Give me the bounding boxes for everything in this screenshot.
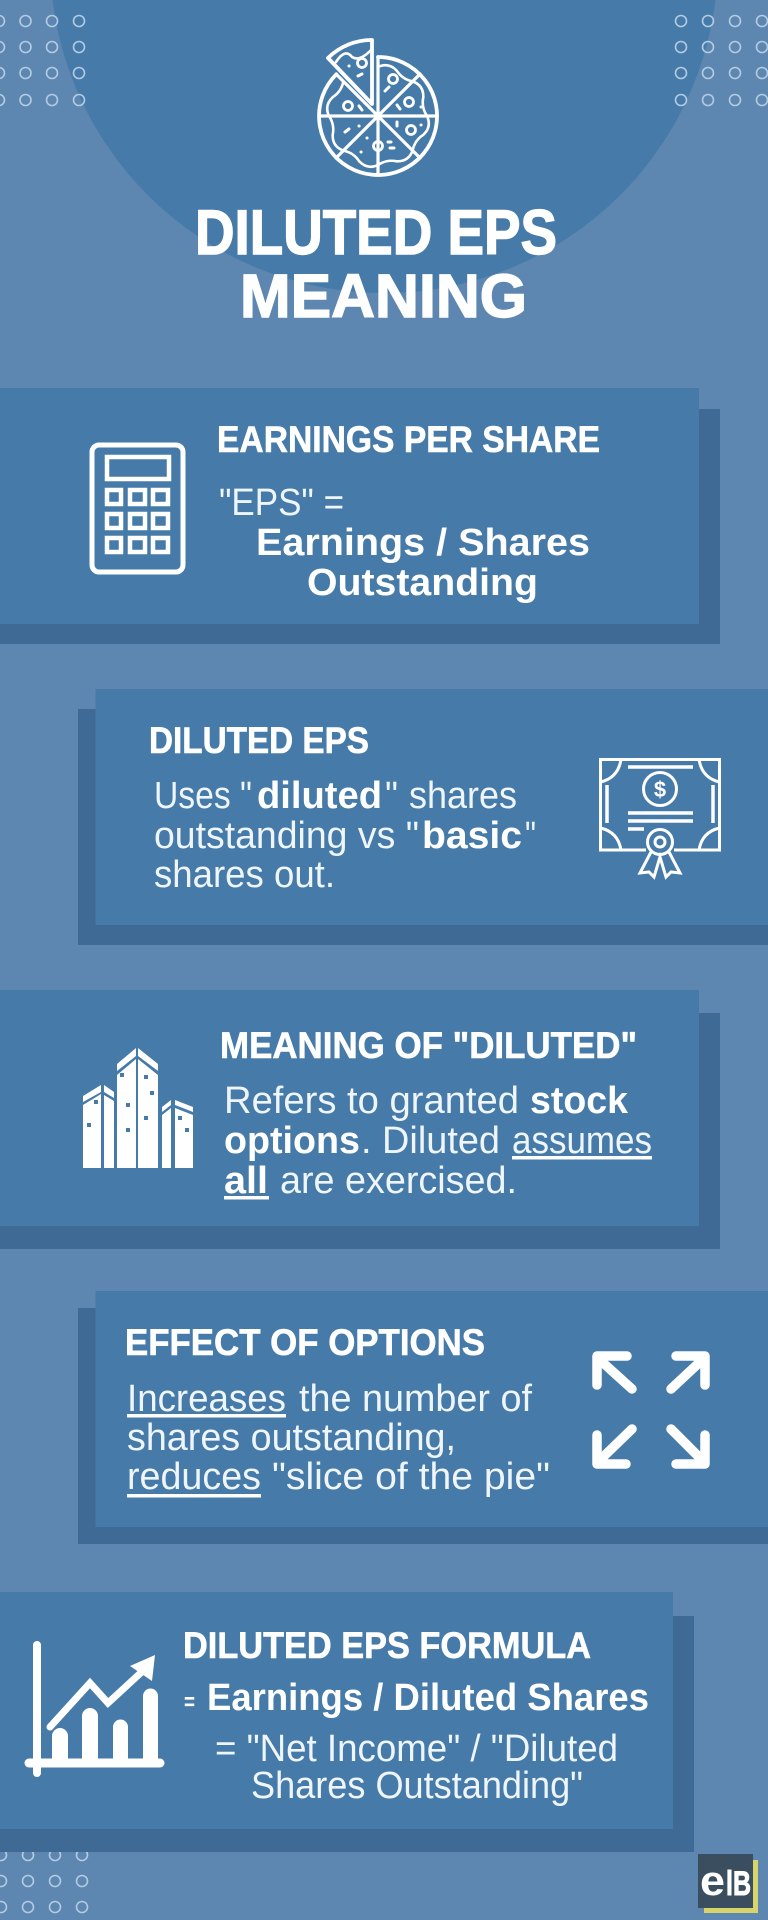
- icon: growth bar chart: [29, 1645, 160, 1773]
- formula text: [219, 482, 590, 604]
- body text: [224, 1080, 652, 1202]
- panel: effect of options: [78, 1291, 768, 1544]
- dot pattern: top left: [0, 16, 84, 106]
- panel: earnings per share: [0, 388, 720, 644]
- body text: "slice of the pie": [272, 1456, 550, 1498]
- panel: diluted EPS formula: [0, 1592, 694, 1852]
- title: MEANING: [240, 262, 527, 330]
- body text: basic: [422, 815, 522, 857]
- heading: EFFECT OF OPTIONS: [125, 1322, 485, 1363]
- heading: DILUTED EPS FORMULA: [183, 1625, 591, 1666]
- title: DILUTED EPS: [195, 198, 557, 268]
- background circle: [50, 0, 718, 293]
- body text: stock: [530, 1080, 629, 1122]
- body text: the number of: [299, 1378, 532, 1420]
- heading: EARNINGS PER SHARE: [217, 419, 600, 460]
- logo: e: [700, 1857, 725, 1904]
- formula text: Earnings / Shares: [256, 522, 590, 564]
- formula text: Outstanding: [307, 562, 538, 604]
- body text: assumes: [512, 1120, 652, 1162]
- body text: shares outstanding,: [127, 1417, 456, 1459]
- dot pattern: top right: [676, 16, 768, 106]
- body text: [127, 1378, 550, 1498]
- heading: MEANING OF "DILUTED": [220, 1025, 637, 1066]
- dot pattern: bottom left: [0, 1850, 88, 1912]
- formula text: =: [184, 1689, 195, 1716]
- logo: [698, 1854, 758, 1913]
- body text: shares: [409, 775, 517, 817]
- icon: stock certificate: [600, 760, 720, 877]
- icon: calculator: [92, 445, 183, 572]
- body text: options: [224, 1120, 360, 1162]
- body text: ": [525, 815, 536, 857]
- panel: diluted EPS: [78, 689, 768, 945]
- body text: reduces: [127, 1456, 261, 1498]
- heading: DILUTED EPS: [149, 720, 369, 761]
- body text: Increases: [127, 1378, 286, 1420]
- icon: stock certificate: $: [654, 777, 666, 802]
- body text: outstanding vs ": [154, 815, 419, 857]
- icon: office buildings: [83, 1048, 193, 1168]
- body text: Refers to granted: [224, 1080, 519, 1122]
- body text: Uses ": [154, 775, 252, 817]
- formula text: "EPS" =: [219, 482, 344, 524]
- body text: all: [224, 1160, 268, 1202]
- formula text: = "Net Income" / "Diluted: [215, 1728, 618, 1770]
- formula text: Shares Outstanding": [251, 1765, 583, 1807]
- logo: lB: [726, 1865, 751, 1903]
- formula text: Earnings / Diluted Shares: [207, 1677, 649, 1719]
- formula text: [184, 1677, 649, 1807]
- title: [195, 198, 557, 330]
- body text: shares out.: [154, 854, 335, 896]
- body text: [154, 775, 536, 896]
- panel: meaning of diluted: [0, 990, 720, 1249]
- body text: ": [385, 775, 398, 817]
- body text: . Diluted: [361, 1120, 500, 1162]
- icon: pizza with slice removed: [319, 40, 437, 175]
- icon: four outward arrows: [597, 1356, 705, 1464]
- body text: diluted: [257, 775, 382, 817]
- body text: are exercised.: [280, 1160, 517, 1202]
